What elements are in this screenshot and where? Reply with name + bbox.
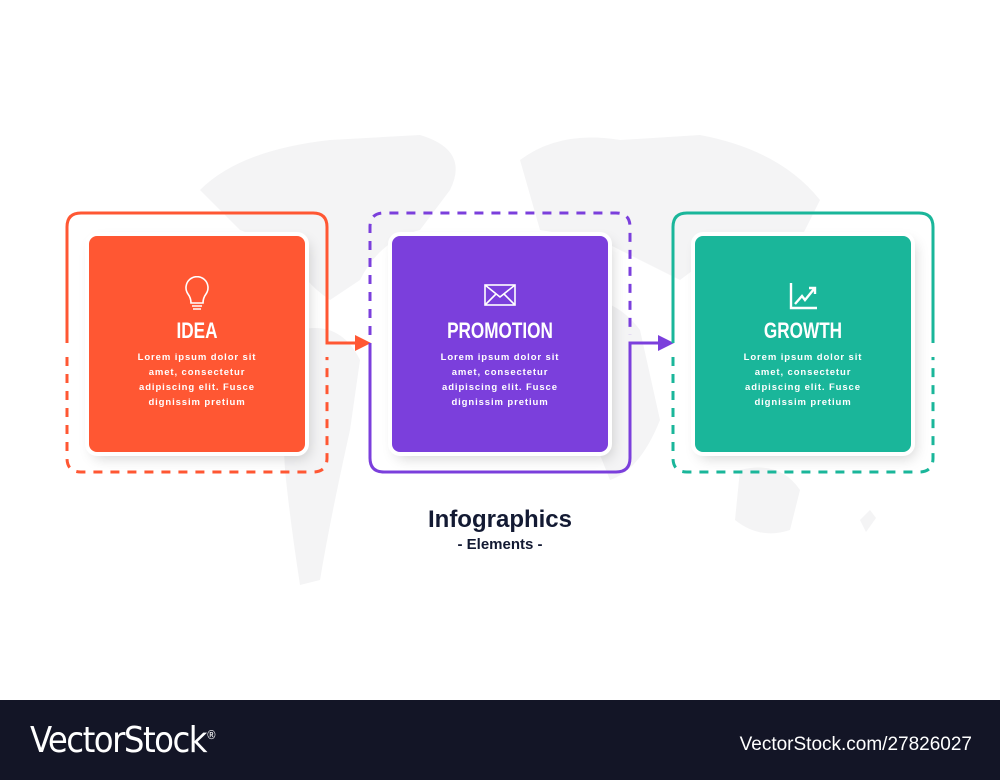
card: promotion: PROMOTION — [447, 318, 553, 343]
title: - Elements - — [457, 536, 543, 553]
url: VectorStock.com/27826027 — [740, 734, 972, 755]
title: Infographics — [428, 506, 572, 533]
frame: promotion — [370, 213, 674, 472]
frame: growth — [673, 213, 933, 472]
frame: idea — [67, 213, 371, 472]
icon: growth chart — [790, 283, 817, 310]
card: growth — [695, 236, 911, 452]
card: idea — [89, 236, 305, 452]
icon: light bulb — [185, 276, 209, 310]
card: growth: GROWTH — [764, 318, 842, 343]
icon: envelope — [484, 284, 516, 306]
card: idea: Lorem ipsum dolor sit amet, consectetur adipiscing elit. Fusce dignissim pretium — [138, 352, 256, 408]
card: promotion — [392, 236, 608, 452]
title — [428, 506, 572, 553]
footer watermark bar — [0, 700, 1000, 780]
card: idea: IDEA — [177, 318, 217, 343]
logo: VectorStock® — [30, 720, 215, 761]
card: growth: Lorem ipsum dolor sit amet, consectetur adipiscing elit. Fusce dignissim pretium — [744, 352, 862, 408]
card: promotion: Lorem ipsum dolor sit amet, consectetur adipiscing elit. Fusce dignissim pretium — [441, 352, 559, 408]
